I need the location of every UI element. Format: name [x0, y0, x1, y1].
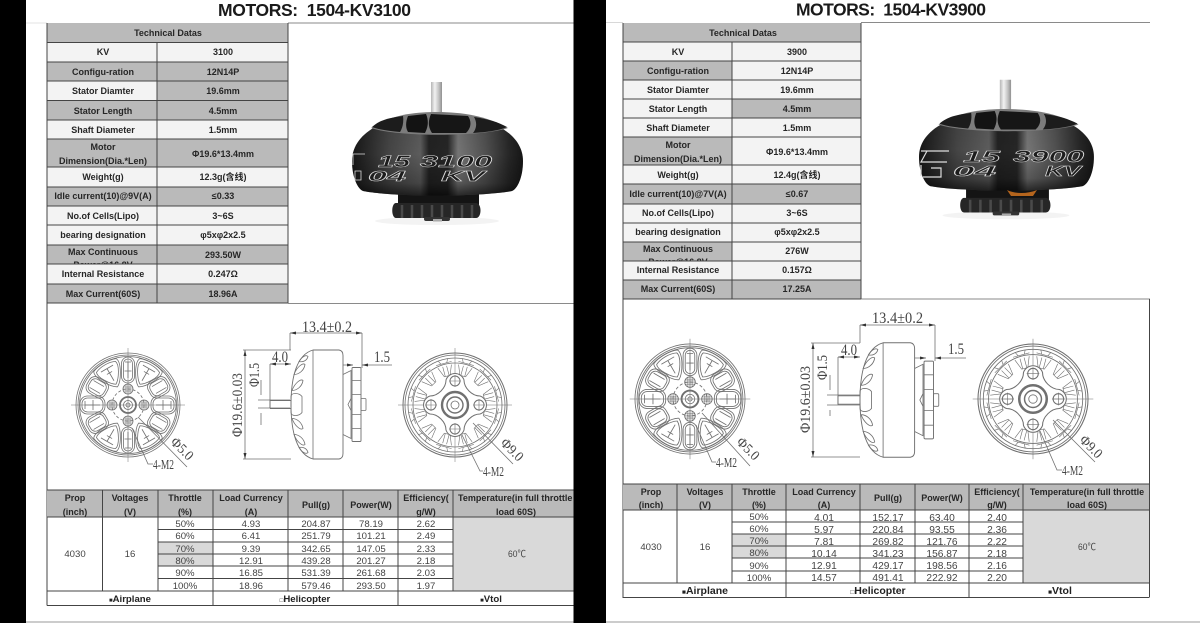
performance table: 2.33 — [417, 544, 435, 555]
specification table: Shaft Diameter — [71, 125, 135, 135]
specification table: 4.5mm — [209, 106, 237, 116]
performance table: 12.91 — [811, 561, 837, 572]
performance table: Efficiency( — [974, 487, 1020, 497]
performance table: 6.41 — [242, 531, 260, 542]
specification table: Weight(g) — [82, 172, 124, 182]
performance table: Throttle — [168, 493, 202, 503]
specification table: 12N14P — [781, 66, 813, 76]
title: MOTORS: 1504-KV3900 — [796, 0, 986, 20]
performance table: (inch) — [63, 507, 87, 517]
performance table: 1.97 — [417, 581, 435, 592]
specification table: 0.247Ω — [208, 269, 238, 279]
specification table: Dimension(Dia.*Len) — [59, 156, 147, 166]
specification table: 3900 — [787, 47, 807, 57]
performance table: ■Airplane — [109, 594, 151, 605]
title: MOTORS: 1504-KV3100 — [218, 0, 411, 20]
performance table: 2.20 — [987, 573, 1007, 584]
performance table: 101.21 — [356, 531, 386, 542]
specification table: Power@16.8V — [73, 260, 133, 270]
specification table: bearing designation — [635, 227, 721, 237]
side view drawing: Φ19.6±0.03 — [230, 373, 246, 437]
performance table: 269.82 — [872, 537, 904, 548]
rear view drawing — [973, 339, 1105, 479]
rear view drawing: Φ9.0 — [497, 436, 526, 465]
side view drawing: 1.5 — [948, 341, 964, 358]
specification table: KV — [97, 47, 109, 57]
performance table: 261.68 — [356, 568, 386, 579]
specification table: Configu-ration — [72, 67, 134, 77]
specification table: Stator Diamter — [647, 85, 710, 95]
performance table: 4030 — [640, 542, 662, 553]
performance table: 4.93 — [242, 519, 260, 530]
front view drawing — [71, 348, 196, 473]
performance table: 16 — [700, 542, 710, 553]
specification table: 293.50W — [205, 250, 242, 260]
performance table: 93.55 — [929, 525, 955, 536]
specification table: Dimension(Dia.*Len) — [634, 154, 722, 164]
performance table: Temperature(in full throttle — [458, 493, 572, 503]
specification table: Φ19.6*13.4mm — [766, 147, 828, 157]
performance table: 80% — [749, 548, 769, 559]
performance table: (A) — [245, 507, 257, 517]
specification table: Max Current(60S) — [641, 284, 715, 294]
performance table: 80% — [175, 556, 195, 567]
performance table: 2.03 — [417, 568, 435, 579]
performance table: 60% — [749, 524, 769, 535]
performance table: 2.49 — [417, 531, 435, 542]
performance table: Voltages — [687, 487, 723, 497]
performance table: 18.96 — [239, 581, 263, 592]
performance table: Efficiency( — [403, 493, 449, 503]
performance table: 16.85 — [239, 568, 263, 579]
performance table: 152.17 — [872, 513, 904, 524]
motor photo: 04 — [953, 163, 998, 180]
performance table: 9.39 — [242, 544, 260, 555]
performance table: 60℃ — [1078, 542, 1096, 553]
performance table: 4030 — [64, 549, 86, 560]
performance table: Temperature(in full throttle — [1030, 487, 1144, 497]
motor photo: 15 — [963, 149, 1002, 166]
performance table: 156.87 — [926, 549, 958, 560]
motor photo: 3900 — [1013, 147, 1085, 166]
performance table: 2.62 — [417, 519, 435, 530]
performance table: 60% — [175, 531, 195, 542]
panel: motor 1504-KV3100 — [26, 0, 577, 623]
specification table: ≤0.33 — [212, 191, 234, 201]
side view drawing: 1.5 — [374, 349, 390, 366]
performance table: 222.92 — [926, 573, 958, 584]
performance table: 90% — [175, 568, 195, 579]
performance table: (V) — [699, 500, 711, 510]
specification table: φ5xφ2x2.5 — [200, 230, 246, 240]
performance table: 16 — [125, 549, 135, 560]
specification table: Φ19.6*13.4mm — [192, 149, 254, 159]
specification table: 12.4g(含线) — [773, 169, 821, 180]
performance table: Power(W) — [921, 493, 963, 503]
performance table: 2.22 — [987, 537, 1007, 548]
motor photo: 3100 — [420, 152, 493, 171]
specification table: Max Current(60S) — [66, 289, 140, 299]
performance table: 10.14 — [811, 549, 837, 560]
performance table: 293.50 — [356, 581, 386, 592]
specification table: Technical Datas — [134, 28, 202, 38]
specification table: 1.5mm — [783, 123, 811, 133]
performance table: 579.46 — [301, 581, 331, 592]
specification table: 12.3g(含线) — [199, 171, 247, 182]
specification table — [47, 23, 288, 606]
specification table: Max Continuous — [68, 247, 138, 257]
performance table: Voltages — [112, 493, 148, 503]
performance table: 2.18 — [417, 556, 435, 567]
performance table: 439.28 — [301, 556, 331, 567]
performance table: 7.81 — [814, 537, 834, 548]
specification table: Technical Datas — [709, 28, 777, 38]
performance table: Load Currency — [792, 487, 856, 497]
specification table: 276W — [785, 246, 809, 256]
performance table: 531.39 — [301, 568, 331, 579]
rear view drawing: 4-M2 — [1062, 464, 1083, 479]
performance table: 70% — [175, 544, 195, 555]
performance table: 50% — [175, 519, 195, 530]
specification table: Power@16.8V — [648, 257, 708, 267]
side view drawing: 13.4±0.2 — [302, 319, 352, 336]
performance table: 12.91 — [239, 556, 263, 567]
specification table: Weight(g) — [657, 170, 699, 180]
performance table: 429.17 — [872, 561, 904, 572]
performance table: (%) — [178, 507, 192, 517]
side view drawing: 4.0 — [841, 342, 857, 359]
specification table: Internal Resistance — [62, 269, 144, 279]
performance table: 90% — [749, 561, 769, 572]
front view drawing: 4-M2 — [153, 458, 174, 473]
panel: motor 1504-KV3900 — [606, 0, 1200, 623]
performance table — [623, 299, 1150, 598]
specification table: 18.96A — [208, 289, 238, 299]
performance table: (A) — [818, 500, 830, 510]
performance table: 201.27 — [356, 556, 386, 567]
performance table: Power(W) — [350, 500, 392, 510]
side view drawing — [230, 319, 392, 459]
performance table: Load Currency — [219, 493, 283, 503]
performance table: 2.18 — [987, 549, 1007, 560]
motor photo: 15 — [378, 152, 411, 171]
performance table: 63.40 — [929, 513, 955, 524]
performance table: 78.19 — [359, 519, 383, 530]
specification table: Shaft Diameter — [646, 123, 710, 133]
motor photo: KV — [441, 168, 489, 185]
performance table: 5.97 — [814, 525, 834, 536]
specification table: No.of Cells(Lipo) — [67, 211, 139, 221]
front view drawing: Φ5.0 — [733, 435, 762, 464]
performance table: (inch) — [639, 500, 663, 510]
specification table: Motor — [666, 140, 691, 150]
specification table: Configu-ration — [647, 66, 709, 76]
motor photo: 04 — [368, 168, 407, 185]
performance table: g/W) — [416, 507, 436, 517]
performance table: (V) — [124, 507, 136, 517]
specification table: ≤0.67 — [786, 189, 808, 199]
performance table: 2.40 — [987, 513, 1007, 524]
performance table: Pull(g) — [874, 493, 902, 503]
performance table: 2.16 — [987, 561, 1007, 572]
specification table: 4.5mm — [783, 104, 811, 114]
performance table: Throttle — [742, 487, 776, 497]
specification table: Idle current(10)@7V(A) — [629, 189, 727, 199]
performance table: 342.65 — [301, 544, 331, 555]
specification table: 0.157Ω — [782, 265, 812, 275]
performance table: 147.05 — [356, 544, 386, 555]
performance table: (%) — [752, 500, 766, 510]
performance table: 2.36 — [987, 525, 1007, 536]
specification table: 19.6mm — [206, 86, 240, 96]
specification table: Stator Diamter — [72, 86, 135, 96]
specification table: Stator Length — [74, 106, 132, 116]
performance table — [47, 490, 577, 606]
performance table: load 60S) — [496, 507, 536, 517]
specification table: 3~6S — [786, 208, 808, 218]
side view drawing — [798, 310, 966, 457]
front view drawing — [630, 339, 762, 471]
side view drawing: 4.0 — [272, 349, 288, 366]
specification table: Internal Resistance — [637, 265, 719, 275]
right-hand black gutter — [574, 0, 606, 623]
performance table: 100% — [173, 581, 198, 592]
front view drawing: 4-M2 — [716, 456, 737, 471]
performance table: 198.56 — [926, 561, 958, 572]
side view drawing: Φ1.5 — [247, 363, 263, 387]
performance table: load 60S) — [1067, 500, 1107, 510]
specification table: bearing designation — [60, 230, 146, 240]
performance table: □Helicopter — [280, 594, 331, 605]
performance table: ■Vtol — [1048, 585, 1072, 597]
specification table: 19.6mm — [780, 85, 814, 95]
front view drawing: Φ5.0 — [167, 435, 196, 464]
performance table: 121.76 — [926, 537, 958, 548]
performance table: Prop — [641, 487, 662, 497]
specification table — [623, 23, 861, 598]
specification table: Motor — [90, 142, 116, 152]
specification table: φ5xφ2x2.5 — [774, 227, 820, 237]
performance table: 100% — [747, 573, 772, 584]
specification table: Max Continuous — [643, 244, 713, 254]
specification table: 3100 — [213, 47, 233, 57]
performance table: 50% — [749, 512, 769, 523]
performance table: Pull(g) — [302, 500, 330, 510]
motor photo — [352, 82, 523, 225]
performance table: 14.57 — [811, 573, 837, 584]
motor photo — [919, 80, 1094, 219]
specification table: 1.5mm — [209, 125, 237, 135]
specification table: Idle current(10)@9V(A) — [54, 191, 152, 201]
side view drawing: Φ1.5 — [815, 355, 831, 380]
performance table: ■Vtol — [480, 594, 502, 605]
motor photo: KV — [1045, 163, 1084, 180]
performance table: 491.41 — [872, 573, 904, 584]
specification table: KV — [672, 47, 684, 57]
specification table: Stator Length — [649, 104, 707, 114]
side view drawing: Φ19.6±0.03 — [798, 366, 814, 433]
rear view drawing: 4-M2 — [483, 465, 504, 480]
specification table: 12N14P — [207, 67, 239, 77]
specification table: No.of Cells(Lipo) — [642, 208, 714, 218]
performance table: 341.23 — [872, 549, 904, 560]
performance table: 70% — [749, 536, 769, 547]
performance table: 204.87 — [301, 519, 331, 530]
performance table: ■Airplane — [682, 585, 728, 597]
side view drawing: 13.4±0.2 — [872, 310, 923, 327]
performance table: Prop — [65, 493, 86, 503]
performance table: □Helicopter — [850, 585, 906, 597]
rear view drawing — [398, 348, 526, 480]
rear view drawing: Φ9.0 — [1076, 433, 1105, 462]
specification table: 3~6S — [212, 211, 234, 221]
specification table: 17.25A — [782, 284, 812, 294]
performance table: 220.84 — [872, 525, 904, 536]
performance table: 60℃ — [508, 549, 526, 560]
performance table: 4.01 — [814, 513, 834, 524]
performance table: 251.79 — [301, 531, 331, 542]
performance table: g/W) — [987, 500, 1007, 510]
